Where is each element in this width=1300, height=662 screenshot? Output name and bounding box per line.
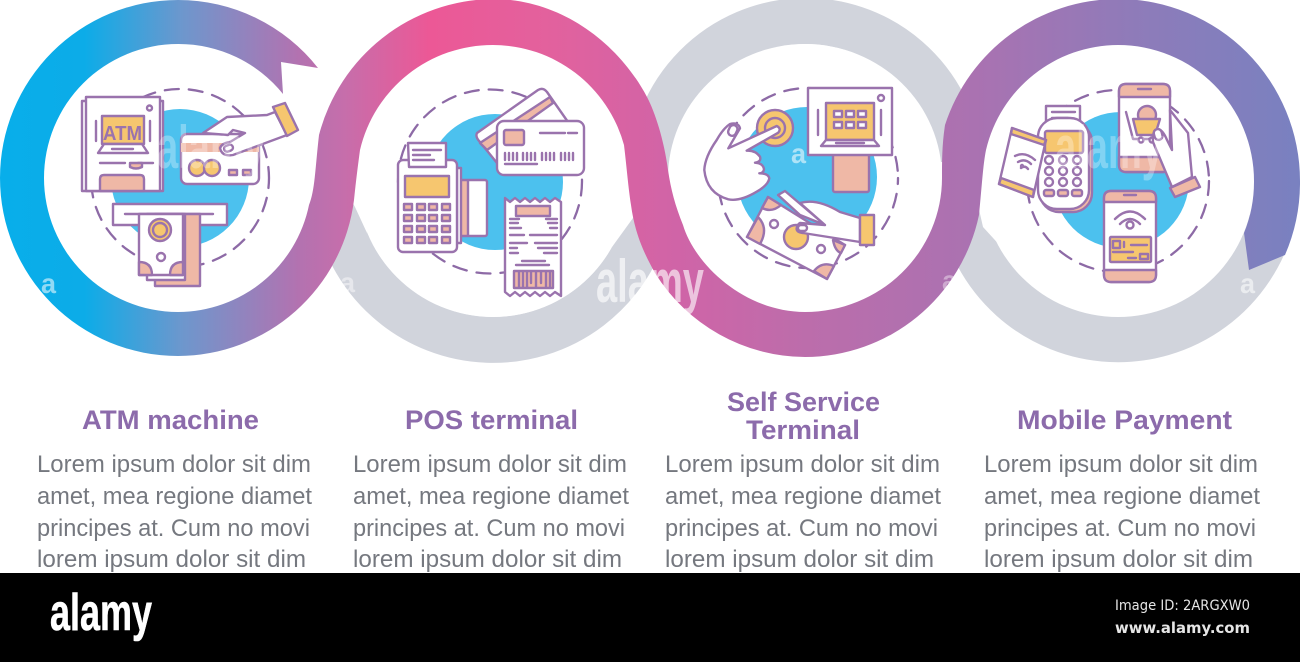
phone top right bbox=[1119, 84, 1170, 172]
step 1 text: principes at. Cum no movi bbox=[37, 515, 310, 542]
phone left bbox=[999, 128, 1046, 197]
step 3 text: lorem ipsum dolor sit dim bbox=[665, 546, 934, 573]
watermark marks: a bbox=[1240, 268, 1255, 299]
step 3 text: Self Service bbox=[727, 387, 880, 417]
watermark marks: a bbox=[41, 268, 56, 299]
terminal bbox=[1040, 123, 1092, 212]
card slot bbox=[467, 180, 487, 236]
step 4 text bbox=[984, 405, 1260, 573]
credit card bbox=[181, 134, 259, 184]
phone bottom bbox=[1104, 191, 1156, 282]
website: www.alamy.com bbox=[1115, 619, 1250, 637]
touch ripple bbox=[757, 110, 793, 146]
footer logo: alamy bbox=[50, 584, 152, 642]
icon: POS terminal bbox=[398, 89, 584, 296]
hand holding card bbox=[203, 112, 287, 155]
image id: Image ID: 2ARGXW0 bbox=[1115, 598, 1250, 614]
gray rings bbox=[336, 21, 1272, 340]
front card bbox=[497, 121, 584, 175]
step 2 text: principes at. Cum no movi bbox=[353, 515, 625, 542]
step 1 text: amet, mea regione diamet bbox=[37, 483, 312, 510]
icon: mobile payment bbox=[999, 84, 1209, 282]
pointing hand bbox=[704, 123, 780, 200]
watermark marks: alamy bbox=[157, 114, 265, 181]
watermark marks: alamy bbox=[1055, 114, 1163, 181]
cash dispenser bbox=[113, 204, 227, 225]
watermark marks: a bbox=[942, 265, 957, 296]
watermark marks: a bbox=[340, 267, 355, 298]
icon: self service terminal bbox=[704, 88, 898, 279]
watermark marks: a bbox=[791, 138, 806, 169]
step 4 text: principes at. Cum no movi bbox=[984, 515, 1256, 542]
receipt bbox=[505, 198, 561, 296]
step 1 text: lorem ipsum dolor sit dim bbox=[37, 546, 306, 573]
ATM body bbox=[82, 97, 163, 191]
step 1 text bbox=[37, 405, 312, 573]
step 2 text: Lorem ipsum dolor sit dim bbox=[353, 451, 627, 478]
banknote bbox=[778, 191, 825, 225]
terminal bbox=[398, 160, 457, 252]
step 1 text: ATM machine bbox=[82, 405, 259, 435]
step 4 text: lorem ipsum dolor sit dim bbox=[984, 546, 1253, 573]
step 3 text: Terminal bbox=[746, 415, 860, 445]
step 2 text: lorem ipsum dolor sit dim bbox=[353, 546, 622, 573]
step 1 text: Lorem ipsum dolor sit dim bbox=[37, 451, 311, 478]
kiosk bbox=[833, 150, 869, 192]
hand on phone bbox=[1153, 110, 1192, 187]
step 4 text: Mobile Payment bbox=[1017, 405, 1232, 435]
ATM body: ATM bbox=[103, 123, 142, 145]
step 2 text: POS terminal bbox=[405, 405, 578, 435]
white disks bbox=[44, 44, 1254, 317]
footer bar bbox=[0, 573, 1300, 662]
step 3 text: amet, mea regione diamet bbox=[665, 483, 941, 510]
flowing gradient ribbon with arrow bbox=[0, 0, 1300, 357]
back card bbox=[476, 89, 568, 172]
watermark marks bbox=[41, 114, 1255, 315]
step 3 text: principes at. Cum no movi bbox=[665, 515, 938, 542]
step 3 text: Lorem ipsum dolor sit dim bbox=[665, 451, 940, 478]
icon: ATM machine bbox=[82, 89, 298, 286]
step 4 text: amet, mea regione diamet bbox=[984, 483, 1260, 510]
step 4 text: Lorem ipsum dolor sit dim bbox=[984, 451, 1258, 478]
hand holding cash bbox=[797, 202, 860, 242]
step 3 text bbox=[665, 387, 941, 573]
step 2 text bbox=[353, 405, 629, 573]
watermark marks: alamy bbox=[596, 248, 704, 315]
step 2 text: amet, mea regione diamet bbox=[353, 483, 629, 510]
